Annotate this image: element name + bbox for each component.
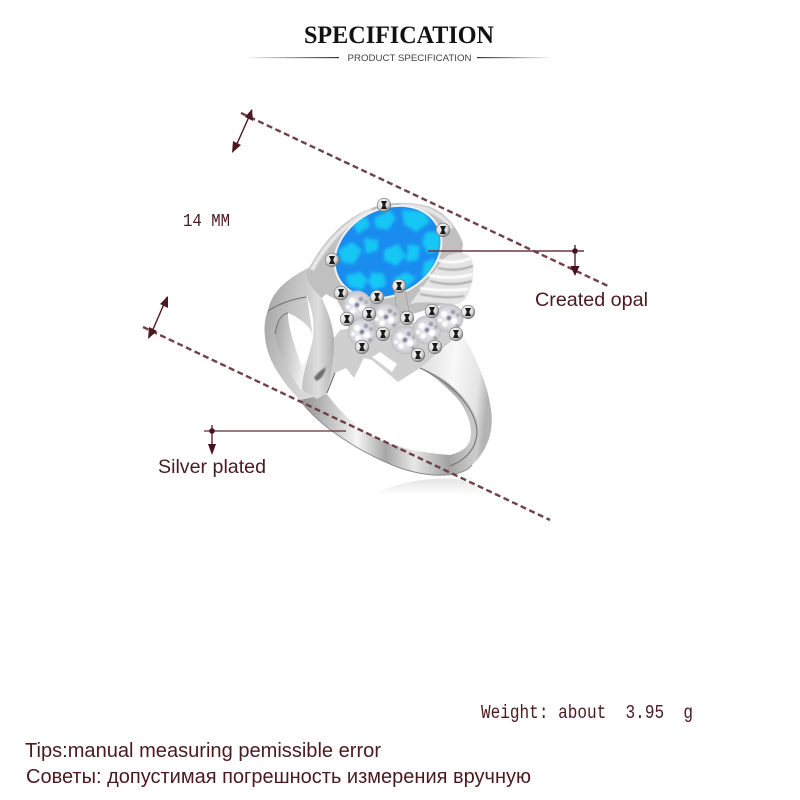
weight: Weight: about 3.95 g <box>481 702 693 724</box>
leader: silver plated <box>204 425 346 455</box>
top dashed dimension line <box>241 113 608 286</box>
bezel <box>307 203 463 318</box>
ring illustration <box>265 186 492 475</box>
leader: created opal <box>428 245 584 276</box>
diamonds <box>342 290 464 354</box>
ring head base <box>327 320 462 393</box>
bottom dashed dimension line <box>143 327 550 520</box>
ring band and right shank <box>300 335 492 475</box>
tips russian: Советы: допустимая погрешность измерения вручную <box>26 766 531 788</box>
fan ridges <box>410 253 473 304</box>
ring left shank <box>265 267 327 400</box>
prongs <box>325 198 475 362</box>
bottom dimension arrow <box>148 296 168 339</box>
title: SPECIFICATION <box>304 22 494 49</box>
prong post <box>394 288 409 312</box>
dimension label: 14 MM <box>183 212 230 232</box>
blue opal stone <box>334 204 442 299</box>
label: silver plated: Silver plated <box>158 456 266 478</box>
tips english: Tips:manual measuring pemissible error <box>25 740 381 762</box>
top dimension arrow <box>232 109 253 153</box>
subtitle: PRODUCT SPECIFICATION <box>348 53 472 64</box>
ring centre twist <box>302 267 334 399</box>
label: created opal: Created opal <box>535 289 648 311</box>
ring reflection <box>373 479 483 495</box>
